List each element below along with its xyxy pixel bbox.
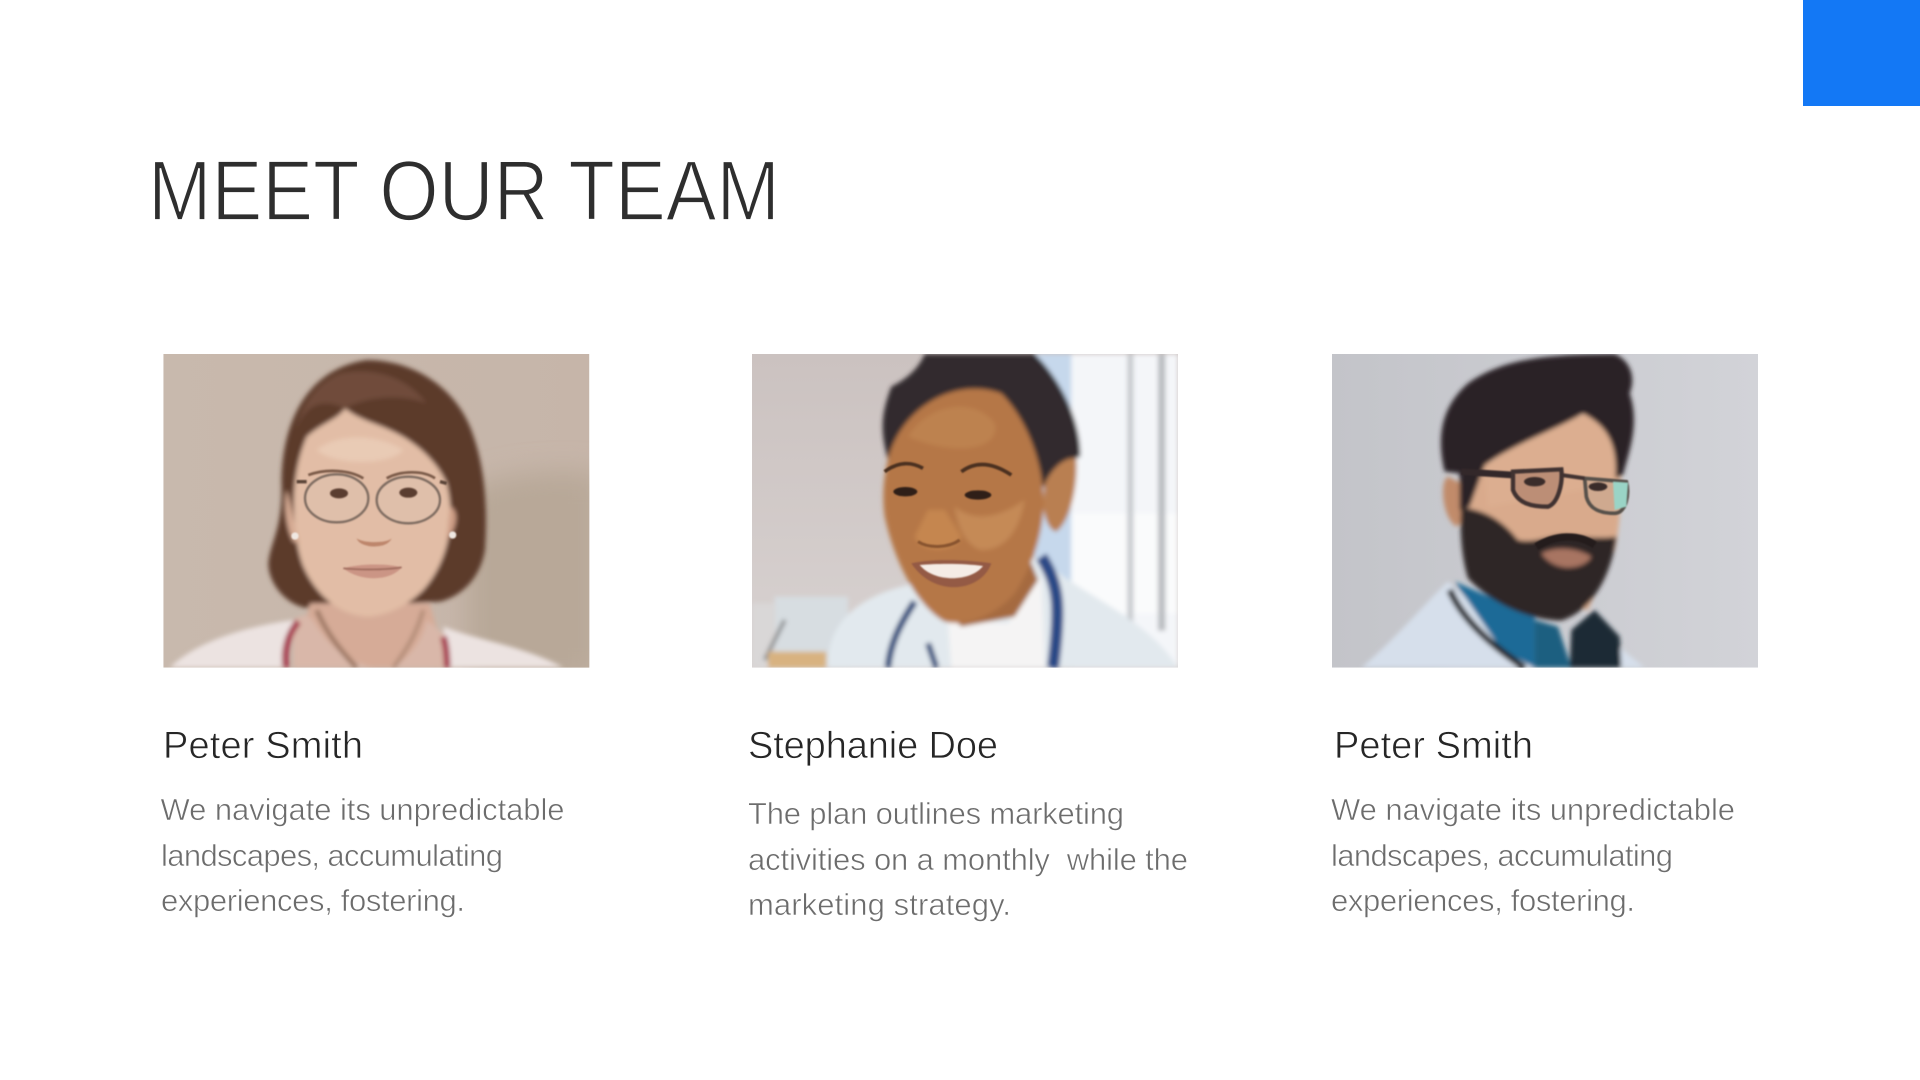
description: The plan outlines marketing xyxy=(748,796,1124,831)
name: Stephanie Doe xyxy=(748,725,998,767)
description: We navigate its unpredictable xyxy=(160,792,564,827)
panel: team member 3 xyxy=(1331,354,1758,918)
panel: team member 2 xyxy=(748,354,1188,922)
description: experiences, fostering. xyxy=(161,883,465,918)
description: marketing strategy. xyxy=(748,887,1011,922)
description: We navigate its unpredictable xyxy=(1331,792,1735,827)
photo: bearded man with glasses xyxy=(1332,354,1758,668)
photo: smiling woman doctor xyxy=(752,354,1178,668)
description: experiences, fostering. xyxy=(1331,883,1635,918)
panel: team member 1 xyxy=(160,354,600,918)
blue corner square xyxy=(1803,0,1920,106)
description: activities on a monthly while the xyxy=(748,842,1188,877)
name: Peter Smith xyxy=(163,725,363,767)
description: landscapes, accumulating xyxy=(1331,838,1673,873)
name: Peter Smith xyxy=(1334,725,1533,767)
title: MEET OUR TEAM xyxy=(148,144,780,239)
description xyxy=(1331,792,1735,918)
photo: woman with glasses xyxy=(163,354,600,680)
description xyxy=(748,796,1188,922)
description xyxy=(160,792,564,918)
description: landscapes, accumulating xyxy=(161,838,503,873)
